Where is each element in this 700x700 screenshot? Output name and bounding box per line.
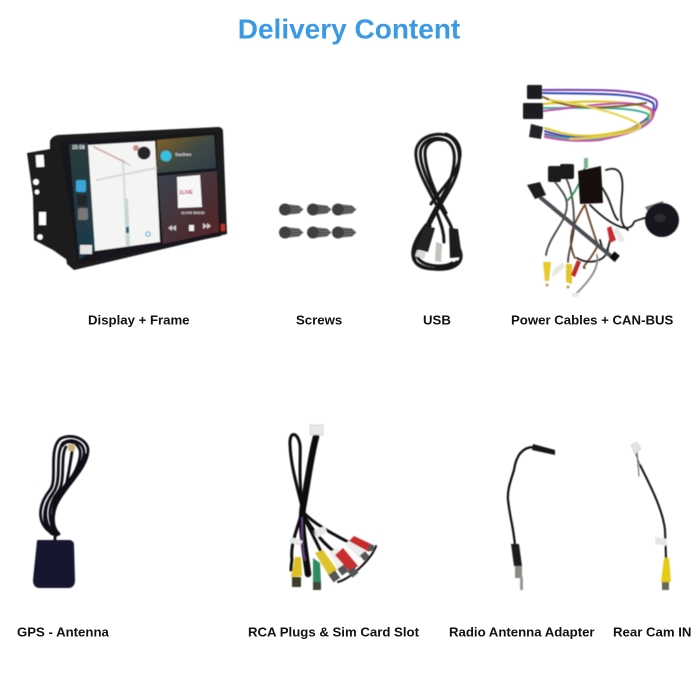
music tile [158, 171, 225, 244]
label: screws: Screws [296, 312, 342, 328]
app side bar: 15:58 [72, 145, 85, 151]
label: display and frame: Display + Frame [88, 312, 190, 328]
title: Delivery Content [238, 14, 460, 44]
RCA plugs [291, 536, 374, 590]
search tile: Suchen [175, 152, 192, 157]
music tile: 1LIVE DIGGI [181, 210, 205, 215]
app side bar [69, 143, 95, 259]
CAN-BUS harness [527, 158, 648, 297]
metal mounting bracket [27, 148, 70, 262]
socket end [532, 444, 555, 455]
screw top row [279, 204, 356, 216]
screw bottom row [279, 226, 356, 238]
panel: GPS antenna [33, 436, 88, 588]
panel: RCA plugs and SIM card slot [289, 425, 376, 590]
antenna cable [40, 436, 88, 542]
panel: USB cable [413, 134, 462, 269]
label: radio antenna adapter: Radio Antenna Adapter [449, 624, 595, 640]
cable bundle [290, 434, 376, 582]
cable labels [289, 526, 327, 546]
panel: power cables [523, 85, 679, 297]
label: RCA plugs: RCA Plugs & Sim Card Slot [248, 624, 420, 640]
adapter cable [508, 447, 534, 546]
top wiring harness [523, 85, 657, 141]
head unit body [50, 127, 227, 270]
yellow RCA plug [661, 558, 671, 590]
antenna plug [511, 544, 523, 590]
cable tag [655, 537, 667, 546]
map panel [88, 141, 160, 251]
music tile: 1LIVE [179, 190, 194, 196]
label: USB: USB [423, 312, 451, 328]
panel: display and frame [27, 127, 227, 270]
search tile [157, 135, 216, 173]
gold connector [68, 444, 75, 451]
camera cable [640, 465, 666, 558]
label: rear cam in: Rear Cam IN [613, 624, 691, 640]
USB plugs [415, 226, 462, 262]
white JST connector [310, 425, 323, 435]
microphone speaker puck [645, 201, 679, 237]
antenna puck [33, 540, 75, 588]
cable coil [413, 134, 461, 269]
screen [60, 132, 221, 264]
panel: rear cam input [631, 442, 671, 590]
label: GPS antenna: GPS - Antenna [17, 624, 109, 640]
wires and connector [631, 442, 641, 476]
panel: radio antenna adapter [508, 444, 555, 590]
panel: screws [279, 204, 356, 238]
label: power cables: Power Cables + CAN-BUS [511, 312, 674, 328]
